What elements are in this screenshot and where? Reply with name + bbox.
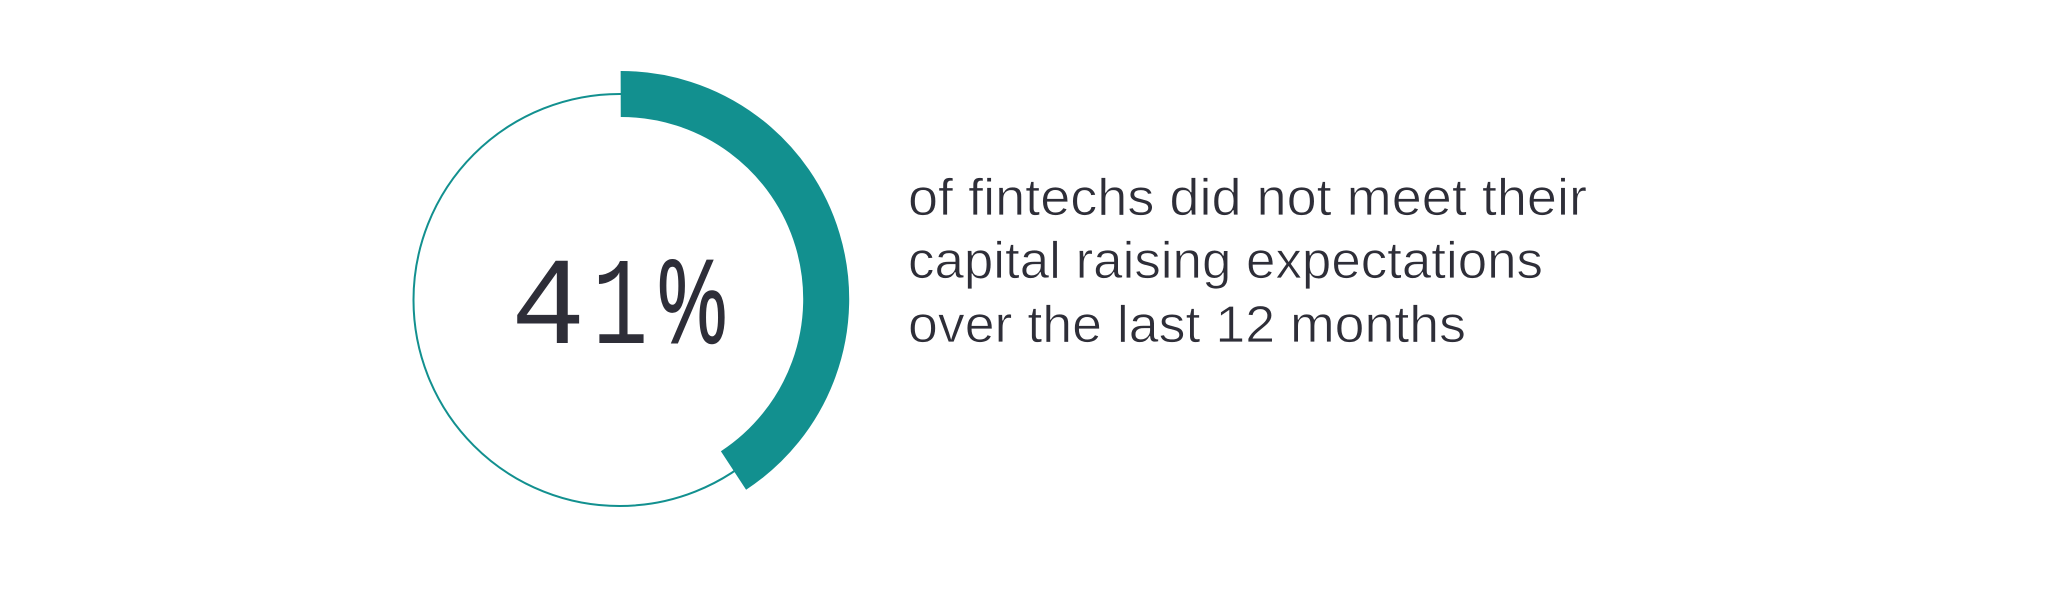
- chart track: thin ring: [414, 94, 826, 506]
- line 1: of fintechs did not meet their: [908, 169, 1587, 227]
- digit 4: 4: [511, 241, 585, 381]
- donut chart: 41%: [414, 94, 826, 506]
- chart value arc: 41%: [621, 94, 826, 471]
- description text: [908, 169, 1587, 354]
- line 3: over the last 12 months: [908, 296, 1466, 354]
- digit 1: 1: [592, 240, 648, 380]
- line 2: capital raising expectations: [908, 232, 1543, 290]
- big number: 41%: [511, 236, 727, 381]
- percent sign: %: [657, 236, 727, 369]
